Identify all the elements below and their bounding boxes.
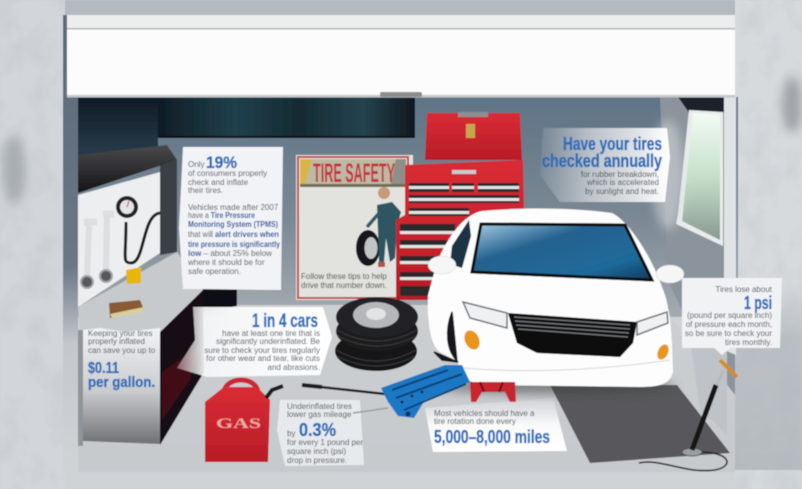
icon: yellow box bbox=[126, 267, 141, 284]
callout: consumer statistic: where it should be for bbox=[187, 258, 265, 267]
icon: sponge bbox=[109, 300, 144, 318]
callout: pressure loss: 1 psi bbox=[744, 293, 772, 313]
callout: annual check: checked annually bbox=[542, 151, 662, 171]
callout: one in four cars: and abrasions. bbox=[268, 363, 320, 372]
callout: consumer statistic: of consumers properly bbox=[188, 169, 267, 178]
turn signals bbox=[461, 328, 671, 361]
white car bbox=[428, 209, 684, 394]
callout: fuel savings: can save you up to bbox=[88, 346, 156, 355]
callout: fuel savings: $0.11 bbox=[88, 360, 119, 377]
callout: gas mileage: Underinflated tires bbox=[287, 402, 352, 411]
callout: one in four cars: sure to check your tires regularly bbox=[204, 346, 320, 355]
callout: consumer statistic: their tires. bbox=[188, 186, 223, 195]
mechanic with tire bbox=[356, 187, 401, 267]
callout: gas mileage: by bbox=[287, 429, 295, 438]
back wall bbox=[78, 97, 738, 317]
grille bbox=[508, 313, 637, 357]
callout: gas mileage: drop in pressure. bbox=[287, 456, 347, 465]
callout: pressure loss bbox=[682, 278, 782, 355]
garage door bbox=[67, 15, 735, 98]
icon: wrenches bbox=[81, 214, 114, 288]
callout: consumer statistic: 19% bbox=[206, 153, 237, 172]
callout: one in four cars: have at least one tire that is bbox=[222, 329, 320, 338]
callout: gas mileage: lower gas mileage bbox=[287, 410, 352, 419]
icon: red gas can bbox=[205, 380, 283, 462]
tire stack bbox=[335, 297, 418, 371]
callout: fuel savings: per gallon. bbox=[88, 374, 155, 391]
callout: pressure loss: (pound per square inch) bbox=[687, 311, 772, 320]
callout: one in four cars: for other wear and tear, like cuts bbox=[206, 354, 320, 363]
callout: annual check: for rubber breakdown, bbox=[581, 170, 659, 179]
callout: fuel savings: properly inflated bbox=[88, 337, 145, 346]
callout: annual check: by sunlight and heat. bbox=[585, 187, 659, 196]
callout: pressure loss: tires monthly. bbox=[725, 338, 772, 347]
callout: gas mileage: square inch (psi) bbox=[287, 447, 346, 456]
red jack stand bbox=[470, 382, 516, 402]
windshield bbox=[472, 224, 652, 280]
callout: consumer statistic: check and inflate bbox=[188, 178, 249, 187]
callout: tire rotation: tire rotation done every bbox=[434, 417, 516, 426]
poster: tire safety: drive that number down. bbox=[301, 281, 387, 290]
callout: one in four cars: significantly underinflated. Be bbox=[216, 337, 321, 346]
red tool chest bbox=[396, 112, 524, 300]
icon: pressure gauge bbox=[116, 196, 160, 263]
callout: pressure loss: Tires lose about bbox=[715, 285, 773, 294]
callout: tire rotation: 5,000–8,000 miles bbox=[434, 427, 550, 447]
callout: tire rotation bbox=[425, 398, 567, 452]
callout: consumer statistic: that will alert drivers when bbox=[188, 230, 279, 239]
bicycle pump bbox=[639, 360, 737, 471]
callout: consumer statistic: have a Tire Pressure bbox=[188, 211, 255, 220]
callout: pressure loss: of pressure each month, bbox=[686, 320, 772, 329]
callout: gas mileage: 0.3% bbox=[299, 420, 336, 440]
callout: consumer statistic: low – about 25% below bbox=[188, 249, 272, 258]
poster: tire safety bbox=[296, 155, 413, 300]
front wheel arch bbox=[434, 312, 458, 362]
callout: fuel savings bbox=[83, 328, 160, 444]
callout: fuel savings: Keeping your tires bbox=[88, 329, 152, 338]
callout: tire rotation: Most vehicles should have a bbox=[434, 409, 535, 418]
callout: gas mileage bbox=[277, 400, 364, 466]
callout: consumer statistic: safe operation. bbox=[188, 267, 241, 276]
callout: annual check: Have your tires bbox=[563, 134, 662, 154]
callout: one in four cars: 1 in 4 cars bbox=[252, 311, 318, 332]
callout: one in four cars bbox=[177, 307, 332, 377]
icon: red gas can: GAS bbox=[216, 416, 261, 432]
callout: consumer statistic: Only bbox=[188, 160, 204, 169]
poster: tire safety: TIRE SAFETY bbox=[313, 158, 395, 188]
callout: consumer statistic: tire pressure is significantly bbox=[188, 240, 280, 249]
poster caption: Follow these tips to help bbox=[301, 272, 387, 281]
workbench bbox=[78, 145, 237, 446]
callout: pressure loss: so be sure to check your bbox=[685, 329, 772, 338]
callout: annual check: which is accelerated bbox=[586, 178, 659, 187]
callout: annual check bbox=[540, 128, 670, 202]
callout: consumer statistic: Monitoring System (TPMS) bbox=[188, 220, 278, 229]
floor mat bbox=[550, 385, 730, 463]
dark upper window band bbox=[78, 97, 415, 159]
callout: consumer statistic: Vehicles made after 2007 bbox=[188, 203, 279, 212]
headlights bbox=[463, 302, 668, 335]
side mirrors bbox=[428, 256, 684, 283]
callout: gas mileage: for every 1 pound per bbox=[287, 438, 363, 447]
callout: consumer statistic bbox=[179, 147, 283, 290]
blue floor jack bbox=[302, 365, 470, 418]
floor bbox=[78, 305, 735, 472]
side wall with window bbox=[652, 97, 736, 435]
